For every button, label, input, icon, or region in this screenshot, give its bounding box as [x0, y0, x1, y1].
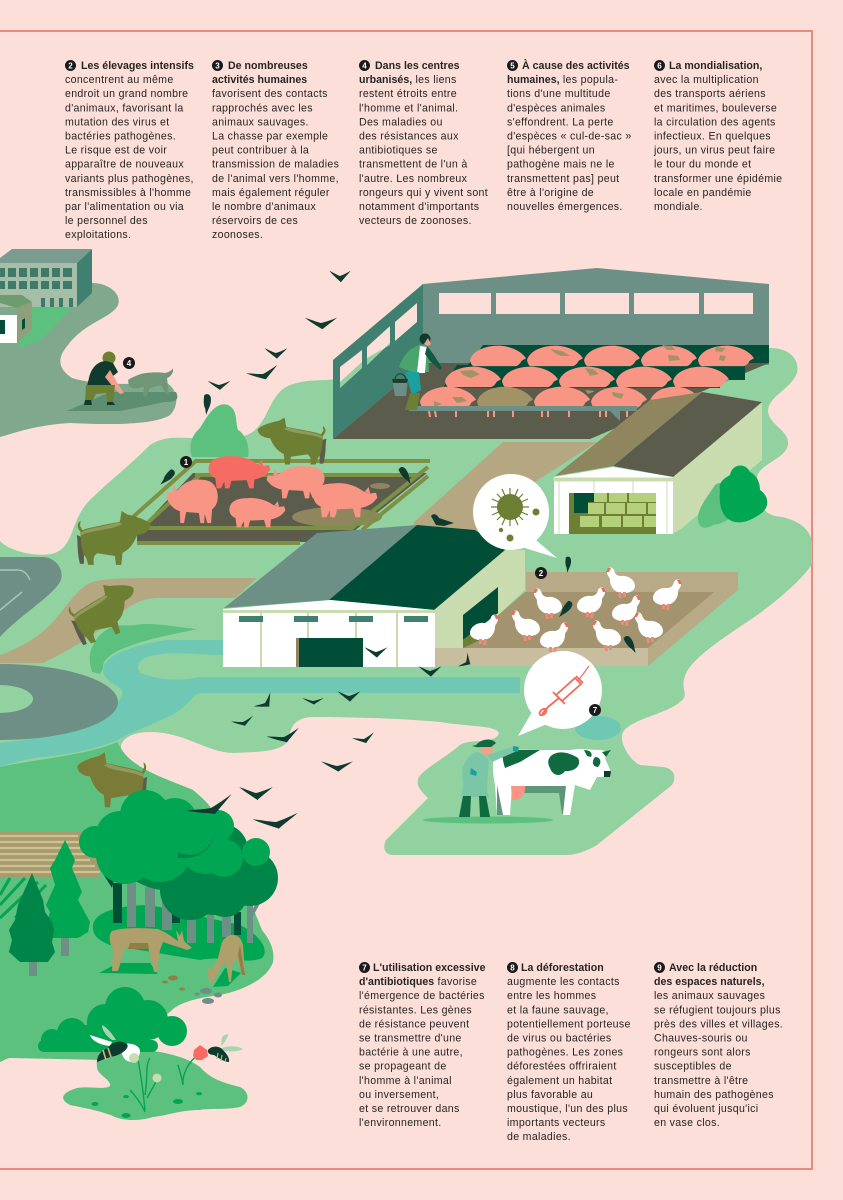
- text block 6: avec la multiplication: [654, 74, 759, 86]
- text block 8: pathogènes. Les zones: [507, 1047, 623, 1059]
- path: sandy track to barns: [413, 442, 597, 540]
- text block 4: l'autre. Les nombreux: [359, 173, 468, 185]
- hay barn front: [554, 467, 673, 534]
- chickens: [470, 568, 682, 653]
- barn windows: [239, 616, 428, 622]
- speech bubble: syringe: [518, 651, 602, 736]
- badge 1: [180, 456, 192, 468]
- text block 5: nouvelles émergences.: [507, 201, 623, 213]
- text block 6: La mondialisation,: [669, 60, 762, 72]
- perched bird on bush: [204, 394, 211, 415]
- wild boar lower: [77, 752, 147, 807]
- text block 3: La chasse par exemple: [212, 130, 328, 142]
- text block 2: mutation des virus et: [65, 116, 169, 128]
- poultry yard: [436, 572, 738, 666]
- barn side wall: [434, 550, 525, 667]
- syringe icon: [538, 666, 589, 716]
- barn dark roof: [329, 525, 505, 610]
- text block 9: Avec la réduction: [669, 962, 757, 974]
- pen mud: [292, 483, 390, 527]
- text block 6: infectieux. En quelques: [654, 130, 771, 142]
- badge 7: [589, 704, 601, 716]
- land: lower mid green: [0, 742, 273, 1062]
- text block 8: plus favorable au: [507, 1089, 593, 1101]
- text block 3: de l'animal vers l'homme,: [212, 173, 339, 185]
- text block 8: de maladies.: [507, 1131, 571, 1143]
- text block 8: augmente les contacts: [507, 976, 620, 988]
- bee left: [90, 1025, 128, 1062]
- deer grazing: [99, 928, 192, 974]
- text block 7: [359, 962, 486, 1129]
- text block 6: jours, un virus peut faire: [653, 145, 775, 157]
- text block 9: rongeurs sont alors: [654, 1047, 751, 1059]
- barn grey roof: [224, 525, 417, 608]
- badge 4: 4: [127, 359, 132, 368]
- text block 5: [507, 59, 632, 213]
- trough rail: [409, 406, 637, 421]
- text block 8: entre les hommes: [507, 990, 596, 1002]
- text block 7: favorise: [434, 976, 477, 988]
- pebbles: [162, 976, 222, 1004]
- text block 9: humain des pathogènes: [654, 1089, 774, 1101]
- text block 4: des résistances aux: [359, 130, 459, 142]
- main pig barn: [333, 268, 769, 439]
- shrub on river bank: [90, 624, 197, 674]
- text block 5: pathogène mais ne le: [507, 159, 615, 171]
- text block 3: favorisent des contacts: [212, 88, 328, 100]
- forest: [9, 790, 278, 976]
- perched birds by pen: [159, 465, 414, 488]
- text block 8: La déforestation: [521, 962, 604, 974]
- text block 5: d'espèces « cul-de-sac »: [507, 130, 632, 142]
- text block 3: mais également réguler: [212, 187, 330, 199]
- text block 7: L'utilisation excessive: [373, 962, 486, 974]
- text block 7: résistantes. Les gènes: [359, 1004, 472, 1016]
- text block 8: également un habitat: [507, 1075, 612, 1087]
- hay barn: [554, 392, 762, 534]
- text block 3: peut contribuer à la: [212, 145, 309, 157]
- virus icon: [491, 488, 540, 542]
- text block 6: locale en pandémie: [654, 187, 752, 199]
- text block 5: les popula-: [560, 74, 618, 86]
- text block 4: vecteurs de zoonoses.: [359, 215, 472, 227]
- text block 7: d'antibiotiques: [359, 976, 434, 988]
- text block 6: le tour du monde et: [654, 159, 751, 171]
- text block 5: À cause des activités: [522, 59, 630, 72]
- text block 3: rapprochés avec les: [212, 102, 313, 114]
- text block 3: zoonoses.: [212, 229, 263, 241]
- text block 9: des espaces naturels,: [654, 976, 765, 988]
- text block 3: le nombre d'animaux: [212, 201, 316, 213]
- ground shadow: [423, 816, 553, 824]
- text block 4: restent étroits entre: [359, 88, 457, 100]
- text block 2: exploitations.: [65, 229, 131, 241]
- text block 5: d'espèces animales: [507, 102, 605, 114]
- barn open door: [463, 587, 498, 648]
- pig: [167, 479, 218, 523]
- roundabout: [0, 664, 118, 740]
- building: small white house: [0, 295, 32, 343]
- flock of birds: [186, 271, 475, 832]
- barn door: [296, 638, 363, 667]
- river: [0, 640, 520, 767]
- text block 2: Les élevages intensifs: [81, 60, 194, 72]
- text block 9: Chauves-souris ou: [654, 1032, 748, 1044]
- text block 4: antibiotiques se: [359, 145, 438, 157]
- building: apartment block: [0, 249, 92, 348]
- text block 2: Le risque est de voir: [65, 145, 167, 157]
- text block 8: [507, 962, 631, 1143]
- bush behind pig pen: [190, 404, 249, 457]
- text block 6: mondiale.: [654, 201, 703, 213]
- badge 2: [535, 567, 547, 579]
- text block 7: se propageant de: [359, 1061, 447, 1073]
- tree trunks: [127, 880, 262, 943]
- canopy crease: [178, 835, 214, 858]
- barn windows: [439, 293, 753, 314]
- badge 1: 1: [184, 458, 189, 467]
- hunter crouching with wild animal: [67, 352, 177, 411]
- hay barn tan roof: [555, 392, 702, 476]
- text block 9: près des villes et villages.: [654, 1018, 783, 1030]
- cow rear leg shade: [497, 785, 503, 815]
- path: sandy track: [0, 578, 257, 663]
- text block 5: [qui hébergent un: [507, 145, 595, 157]
- deer feeding: [207, 935, 245, 987]
- text block 3: réservoirs de ces: [212, 215, 298, 227]
- dark corner: [574, 493, 594, 513]
- pig: [229, 498, 285, 527]
- cow belly shade: [522, 786, 566, 814]
- wild dog: [128, 368, 173, 397]
- land: upper left village: [0, 263, 176, 437]
- wild boar left of pen: [77, 511, 151, 565]
- wild boar on track: [63, 576, 146, 647]
- text block 7: ou inversement,: [359, 1089, 439, 1101]
- text block 5: 5: [510, 62, 515, 70]
- wild boar top: [258, 418, 326, 465]
- pig legs below rail: [428, 411, 628, 417]
- text block 7: bactérie à une autre,: [359, 1047, 463, 1059]
- conifer light: [45, 840, 90, 956]
- text block 6: la circulation des agents: [654, 116, 776, 128]
- text block 5: tions d'une multitude: [507, 88, 611, 100]
- vet and cow: [423, 739, 611, 824]
- text block 5: être à l'origine de: [507, 187, 594, 199]
- text block 9: les animaux sauvages: [654, 990, 765, 1002]
- barn floor: [333, 363, 769, 439]
- pigs row 1: [470, 346, 754, 366]
- badge 7: 7: [593, 706, 598, 715]
- feeding troughs: [443, 345, 769, 388]
- flowers and stems: [92, 1044, 208, 1118]
- text block 7: l'environnement.: [359, 1117, 442, 1129]
- text block 6: et maritimes, bouleverse: [654, 102, 777, 114]
- text block 8: importants vecteurs: [507, 1117, 606, 1129]
- badge 2: 2: [539, 569, 544, 578]
- barn side wall: [333, 284, 423, 439]
- cow muzzle: [604, 771, 611, 777]
- pig: [267, 466, 325, 498]
- pen rails: [133, 460, 430, 543]
- text block 7: l'homme à l'animal: [359, 1075, 452, 1087]
- text block 3: 3: [215, 62, 220, 70]
- text block 4: les liens: [412, 74, 457, 86]
- hay barn side wall: [672, 402, 762, 534]
- hay bales: [580, 493, 656, 527]
- pigs row 2: [445, 367, 729, 387]
- text block 4: 4: [362, 62, 367, 70]
- front canopy: [79, 790, 214, 884]
- text block 6: des transports aériens: [654, 88, 766, 100]
- text block 4: Des maladies ou: [359, 116, 443, 128]
- pig: [314, 483, 377, 517]
- text block 2: [65, 60, 194, 241]
- barn front: [223, 600, 435, 667]
- barn back wall: [423, 268, 769, 365]
- text block 9: [654, 962, 783, 1129]
- text block 4: notamment d'importants: [359, 201, 479, 213]
- red pig: [209, 456, 270, 488]
- text block 2: bactéries pathogènes.: [65, 130, 176, 142]
- text block 8: potentiellement porteuse: [507, 1018, 631, 1030]
- road: upper grey road: [0, 557, 62, 637]
- low bush: [38, 987, 187, 1052]
- text block 7: 7: [362, 964, 367, 972]
- text block 4: Dans les centres: [375, 60, 460, 72]
- yard dirt: [460, 592, 714, 648]
- text block 6: [653, 60, 782, 213]
- forest floor: [93, 905, 265, 961]
- text block 8: moustique, l'un des plus: [507, 1103, 628, 1115]
- text block 9: transmettre à l'être: [654, 1075, 748, 1087]
- perched birds in yard: [557, 557, 639, 654]
- text block 7: l'émergence de bactéries: [359, 990, 485, 1002]
- yard front strip: [436, 648, 648, 666]
- pigs row 3: [420, 387, 700, 408]
- text block 2: par l'alimentation ou via: [65, 201, 184, 213]
- cow spots: [503, 750, 611, 775]
- pen front strip: [137, 532, 357, 542]
- yard base: [436, 572, 738, 666]
- cow udder: [511, 786, 525, 800]
- text block 5: s'effondrent. La perte: [507, 116, 614, 128]
- text block 9: 9: [657, 964, 662, 972]
- canopy highlights: [181, 810, 270, 877]
- text block 7: et se retrouver dans: [359, 1103, 460, 1115]
- text block 8: déforestées offriraient: [507, 1061, 617, 1073]
- conifer dark: [9, 873, 55, 976]
- text block 4: l'homme et l'animal.: [359, 102, 458, 114]
- back canopy: [120, 824, 278, 920]
- text block 2: d'animaux, favorisant la: [65, 102, 184, 114]
- text block 3: animaux sauvages.: [212, 116, 309, 128]
- text block 2: transmissibles à l'homme: [65, 187, 191, 199]
- text block 8: 8: [510, 964, 515, 972]
- mud patches on pigs: [434, 345, 726, 407]
- text block 2: 2: [68, 62, 73, 70]
- text block 9: en vase clos.: [654, 1117, 720, 1129]
- text block 4: transmettent de l'un à: [359, 159, 468, 171]
- text block 5: transmettent pas] peut: [507, 173, 619, 185]
- text block 9: qui évoluent jusqu'ici: [654, 1103, 758, 1115]
- text block 4: urbanisés,: [359, 74, 412, 86]
- text block 2: concentrent au même: [65, 74, 174, 86]
- bee right: [208, 1034, 243, 1062]
- text block 3: activités humaines: [212, 74, 307, 86]
- text block 8: de virus ou bactéries: [507, 1032, 611, 1044]
- pink pigs in the pen: [167, 456, 377, 527]
- text block 4: [359, 60, 488, 227]
- text block 3: transmission de maladies: [212, 159, 339, 171]
- barn side windows: [340, 303, 417, 388]
- text block 2: apparaître de nouveaux: [65, 159, 184, 171]
- hay barn door: [569, 493, 656, 534]
- text block 7: se transmettre d'une: [359, 1032, 462, 1044]
- bucket: [392, 379, 408, 396]
- text block 4: rongeurs qui y vivent sont: [359, 187, 488, 199]
- pen floor: [137, 473, 427, 532]
- shrub near hay barn: [698, 466, 767, 528]
- cow: [493, 749, 611, 815]
- text block 6: 6: [657, 62, 662, 70]
- text block 3: De nombreuses: [228, 60, 308, 72]
- crop field stripes: [0, 832, 100, 918]
- text block 5: humaines,: [507, 74, 560, 86]
- text block 2: le personnel des: [65, 215, 148, 227]
- perched bird on barn roof: [431, 514, 454, 526]
- pig pen: [133, 460, 430, 543]
- poultry barn: [223, 525, 525, 667]
- land: main light green: [0, 348, 812, 855]
- hay barn roof: [613, 392, 762, 477]
- land: flower patch: [63, 1050, 247, 1120]
- river: pool near cow: [575, 716, 621, 740]
- text block 3: [212, 60, 339, 241]
- text block 9: susceptibles de: [654, 1061, 732, 1073]
- speech bubble: virus: [473, 474, 557, 558]
- text block 2: endroit un grand nombre: [65, 88, 188, 100]
- text block 8: et la faune sauvage,: [507, 1004, 609, 1016]
- text block 9: se réfugient toujours plus: [654, 1004, 781, 1016]
- farmer with bucket: [392, 334, 442, 410]
- text block 2: variants plus pathogènes,: [65, 173, 194, 185]
- text block 7: de résistance peuvent: [359, 1018, 469, 1030]
- vet: [459, 739, 519, 817]
- text block 6: transformer une épidémie: [654, 173, 782, 185]
